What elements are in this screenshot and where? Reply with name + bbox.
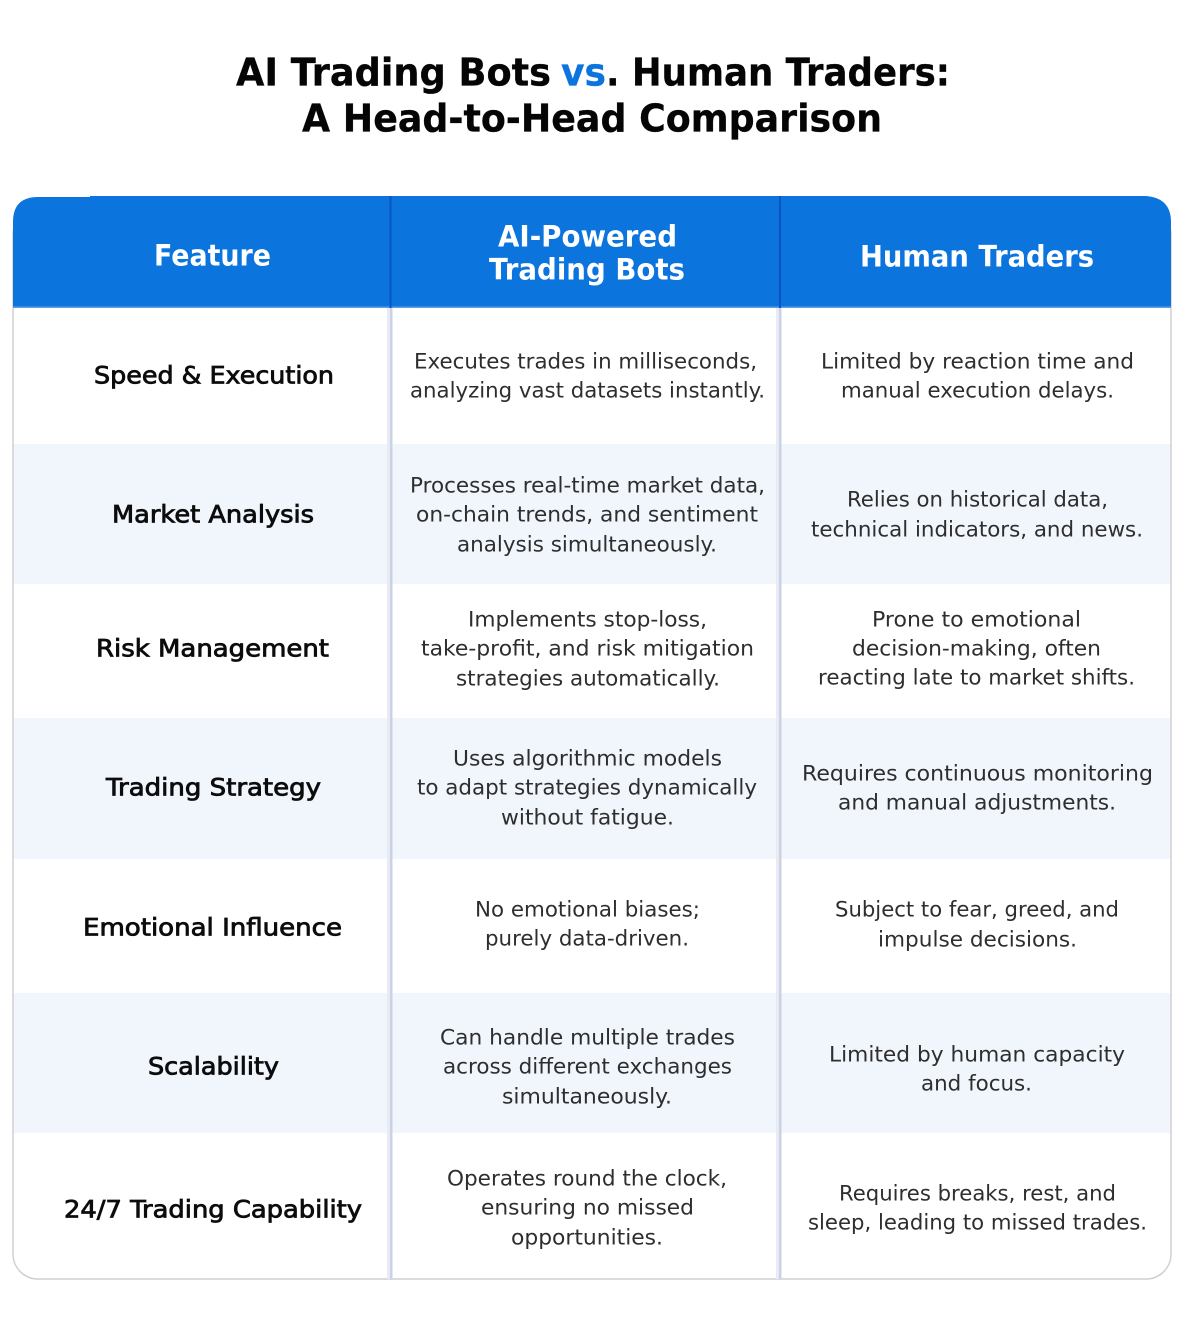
row: emotional influence: purely data-driven. [485,926,689,950]
row: trading strategy [105,746,1153,829]
row: emotional influence: Subject to fear, greed, and [835,897,1119,921]
row: market analysis: on-chain trends, and sentiment [416,502,758,526]
row: speed and execution: manual execution delays. [841,378,1114,402]
row: trading strategy: and manual adjustments. [838,790,1116,814]
header row [13,196,1171,308]
row: risk management: Implements stop-loss, [468,607,707,631]
row: trading strategy: Uses algorithmic models [453,746,722,770]
row band: trading strategy [14,718,1170,859]
title: vs [561,50,606,94]
row: emotional influence [83,897,1119,951]
row: scalability: across different exchanges [443,1054,732,1078]
title [236,50,950,140]
row: market analysis: Processes real-time market data, [410,473,765,497]
row: trading strategy: Requires continuous monitoring [802,761,1153,785]
row: 24/7 trading capability [64,1166,1147,1249]
row: scalability [148,1025,1125,1108]
row: trading strategy: to adapt strategies dynamically [417,775,757,799]
title: . Human Traders: [606,50,950,94]
row: risk management: take-profit, and risk mitigation [421,636,754,660]
title: AI Trading Bots [236,50,551,94]
row: risk management [96,607,1135,690]
row: risk management: Prone to emotional [872,607,1081,631]
row: scalability: simultaneously. [502,1084,672,1108]
row: emotional influence: No emotional biases; [475,897,700,921]
table background [13,210,1171,1279]
row band: market analysis [14,444,1170,584]
row: market analysis: Market Analysis [112,500,314,528]
row: speed and execution [94,349,1134,402]
row: market analysis: analysis simultaneously. [457,532,717,556]
row: trading strategy: without fatigue. [501,805,674,829]
row: 24/7 trading capability: Operates round the clock, [447,1166,727,1190]
header: AI-powered trading bots: AI-Powered [498,219,677,253]
row: market analysis: technical indicators, and news. [811,517,1143,541]
row: emotional influence: Emotional Influence [83,913,342,941]
header: feature: Feature [154,238,271,272]
row: 24/7 trading capability: sleep, leading to missed trades. [808,1210,1147,1234]
row: scalability: Limited by human capacity [829,1042,1125,1066]
row: 24/7 trading capability: Requires breaks, rest, and [839,1181,1116,1205]
header: AI-powered trading bots [489,219,685,286]
row: 24/7 trading capability: 24/7 Trading Capability [64,1195,362,1223]
row: risk management: strategies automatically. [456,666,720,690]
row: risk management: decision-making, often [852,636,1101,660]
row: speed and execution: Speed & Execution [94,361,334,389]
row: 24/7 trading capability: opportunities. [511,1225,663,1249]
title: A Head-to-Head Comparison [302,96,882,140]
header: human traders: Human Traders [860,239,1094,273]
row: market analysis: Relies on historical data, [847,487,1108,511]
row: scalability: Scalability [148,1052,279,1080]
row: market analysis [112,473,1143,556]
row: speed and execution: analyzing vast datasets instantly. [410,378,765,402]
row: trading strategy: Trading Strategy [105,773,321,801]
row band: scalability [14,993,1170,1133]
row: scalability: Can handle multiple trades [440,1025,735,1049]
row: speed and execution: Limited by reaction time and [821,349,1134,373]
header: AI-powered trading bots: Trading Bots [489,252,685,286]
row: speed and execution: Executes trades in milliseconds, [414,349,757,373]
row: emotional influence: impulse decisions. [878,927,1077,951]
row: risk management: reacting late to market shifts. [818,665,1135,689]
row: 24/7 trading capability: ensuring no missed [481,1195,694,1219]
row: risk management: Risk Management [96,634,329,662]
row: scalability: and focus. [921,1071,1032,1095]
